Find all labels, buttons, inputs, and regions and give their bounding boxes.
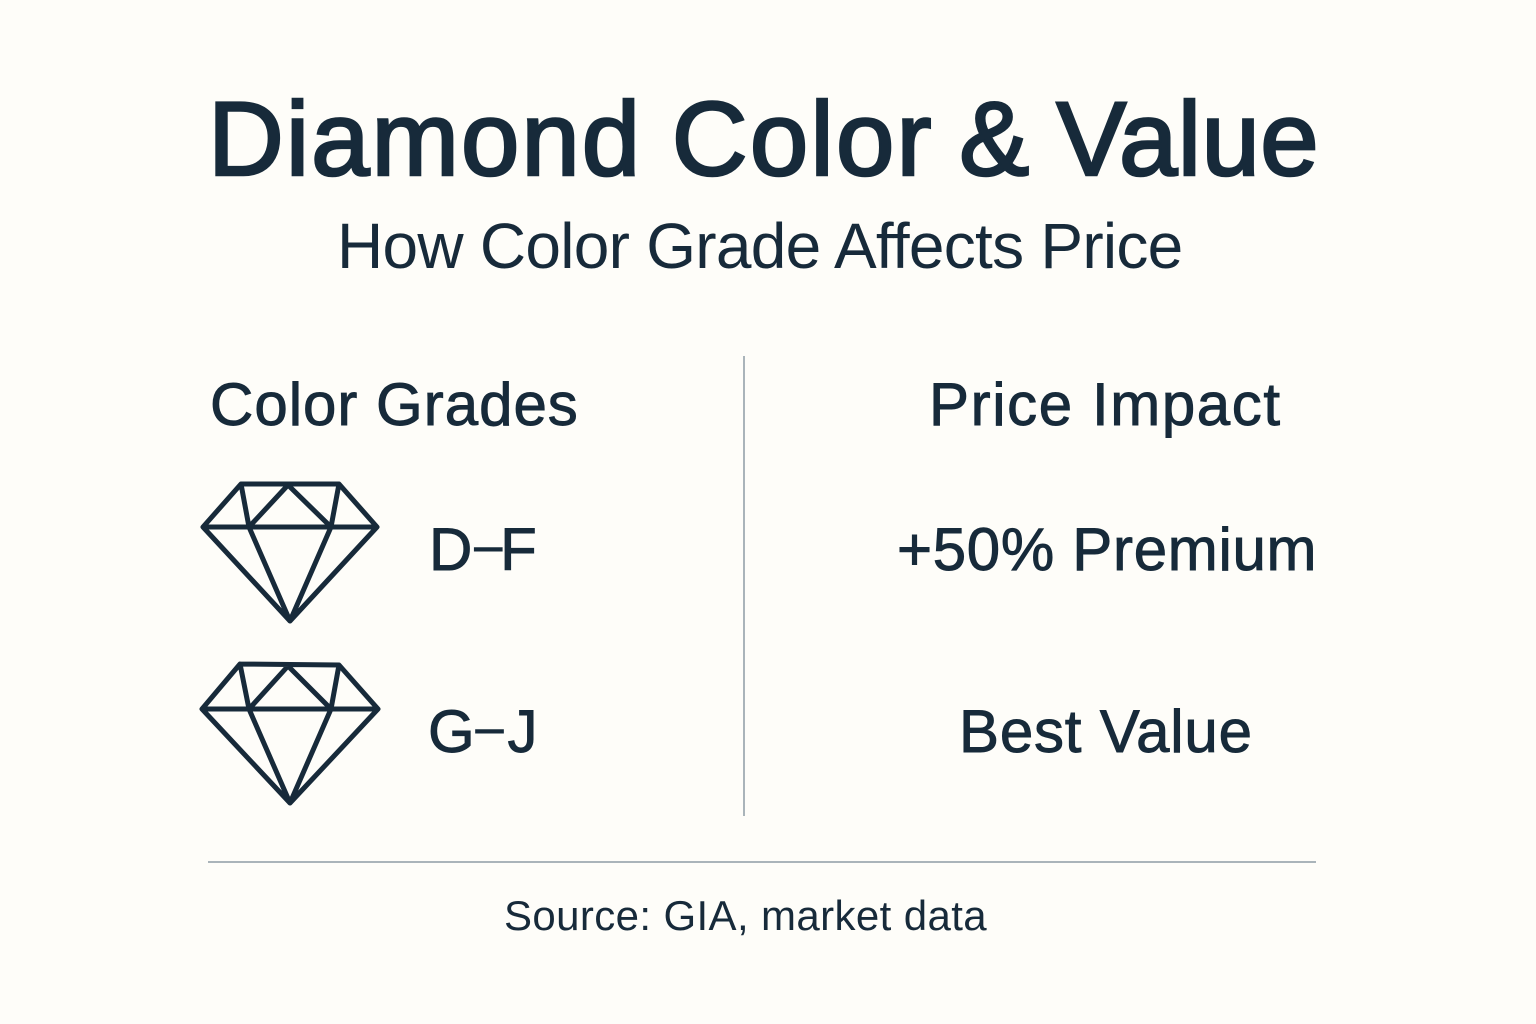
value: best value: Best Value — [959, 698, 1253, 765]
horizontal divider — [208, 861, 1316, 863]
vertical divider — [743, 356, 745, 816]
title: Diamond Color & Value — [208, 81, 1319, 198]
icon: diamond G-J — [199, 662, 381, 806]
grade label G-J: G–J — [428, 698, 537, 765]
grade label D-F: D–F — [429, 516, 537, 583]
source: Source: GIA, market data — [504, 892, 987, 939]
heading: price impact: Price Impact — [929, 371, 1282, 438]
subtitle: How Color Grade Affects Price — [337, 210, 1183, 282]
icon: diamond D-F — [200, 482, 380, 624]
heading: color grades: Color Grades — [210, 371, 579, 438]
value: premium: +50% Premium — [897, 516, 1317, 583]
